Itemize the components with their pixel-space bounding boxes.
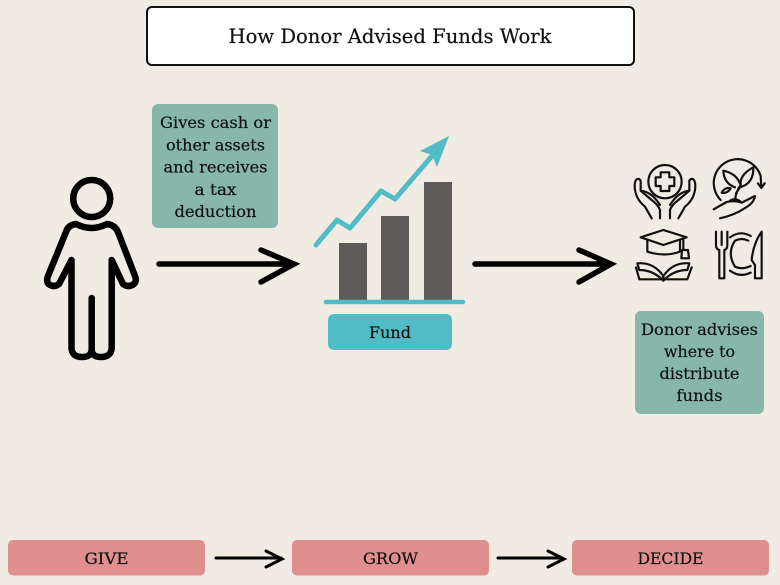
arrow: grow to decide	[498, 551, 564, 567]
label: fund	[328, 314, 452, 350]
title	[147, 7, 634, 65]
icon: person	[47, 180, 136, 357]
label: fund: Fund	[369, 324, 411, 342]
callout: donor advises: Donor advises	[641, 321, 758, 339]
step: grow: GROW	[363, 549, 419, 568]
arrow: fund to causes	[475, 250, 611, 282]
callout: donor advises: where to	[664, 343, 735, 361]
step: decide	[572, 540, 769, 576]
callout: donor advises: funds	[676, 387, 723, 405]
chart: growing fund	[316, 136, 463, 302]
icon: health hands	[635, 165, 695, 218]
arrow: give to grow	[216, 551, 282, 567]
icon: plant in hand	[714, 159, 765, 218]
title: How Donor Advised Funds Work	[228, 25, 552, 48]
callout: gives: and receives	[164, 158, 268, 176]
callout: donor advises	[635, 311, 764, 414]
icon: plate and cutlery	[716, 232, 762, 278]
callout: donor advises: distribute	[660, 365, 740, 383]
callout: gives: a tax	[194, 181, 237, 199]
step: decide: DECIDE	[638, 549, 704, 568]
icon: graduation book	[636, 230, 692, 281]
callout: gives: Gives cash or	[160, 114, 272, 132]
arrow: give to fund	[159, 250, 294, 282]
callout: gives	[152, 104, 278, 228]
callout: gives: deduction	[174, 203, 257, 221]
step: give: GIVE	[84, 549, 128, 568]
step: give	[8, 540, 205, 576]
callout: gives: other assets	[166, 136, 265, 154]
step: grow	[292, 540, 489, 576]
